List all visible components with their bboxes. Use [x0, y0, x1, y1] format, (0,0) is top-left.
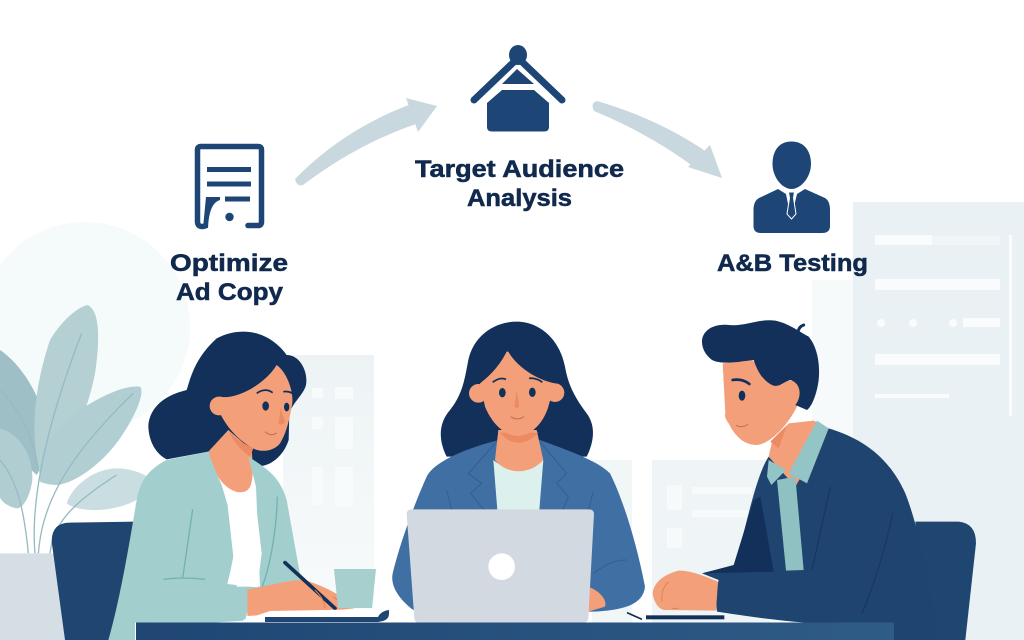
laptop: [407, 509, 594, 623]
face: [480, 352, 555, 436]
label: Target Audience Analysis: Target Audience: [415, 156, 624, 183]
jacket seams: [163, 497, 277, 588]
hair: [441, 322, 593, 457]
mug: [334, 569, 376, 608]
icon: house: [474, 45, 562, 132]
shirt: [493, 460, 543, 510]
icon: person with tie: [754, 142, 830, 233]
label: Target Audience Analysis: Analysis: [467, 185, 572, 212]
background: building centre right: [592, 460, 770, 625]
background: building centre left: [283, 355, 374, 620]
lapels: [447, 440, 593, 510]
blazer: [392, 440, 645, 612]
jacket: [108, 452, 302, 640]
arrow: target audience to A&B testing: [593, 101, 722, 178]
table: [136, 622, 894, 640]
hair: [702, 320, 819, 410]
background: building right: [812, 202, 1024, 640]
label: A&B Testing: A&B Testing: [717, 250, 868, 277]
shirt placket: [777, 477, 804, 571]
pen and pad on desk: [627, 613, 642, 619]
face: [220, 365, 292, 451]
person: man on right: [627, 320, 976, 640]
inner dark shadow: [702, 497, 774, 573]
suit seams: [812, 487, 893, 613]
chair: [915, 522, 976, 640]
hand: [653, 571, 718, 611]
hair: [148, 332, 306, 466]
face: [723, 360, 802, 445]
background: left pale circle: [0, 222, 190, 432]
hand and sleeve: [588, 587, 605, 612]
plant and pot: [0, 305, 150, 640]
icon: document: [198, 146, 262, 228]
label: Optimize Ad Copy: Optimize: [170, 250, 288, 277]
person: woman writing on left: [52, 332, 354, 640]
shirt: [222, 485, 262, 587]
chair: [52, 522, 133, 640]
notepad and pen on desk: [243, 609, 389, 622]
label: Optimize Ad Copy: Ad Copy: [176, 279, 283, 306]
suit: [702, 428, 939, 640]
arrow: optimize ad copy to target audience: [295, 98, 437, 185]
label: Optimize Ad Copy: [170, 250, 288, 306]
label: Target Audience Analysis: [415, 156, 624, 212]
neck: [769, 421, 829, 487]
person: woman at laptop centre: [392, 322, 645, 623]
hand and pen: [247, 580, 354, 616]
neck: [208, 430, 253, 493]
neck: [495, 430, 543, 471]
collar: [767, 421, 829, 485]
